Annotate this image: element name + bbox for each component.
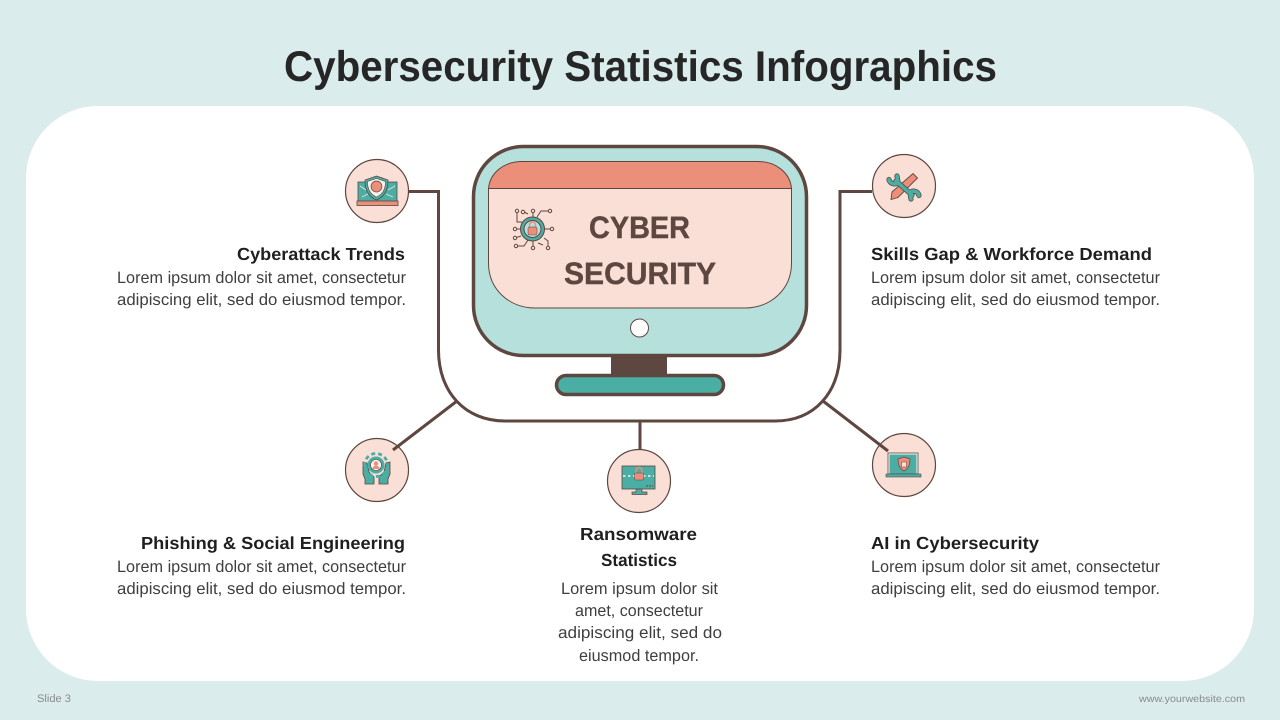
monitor label: CYBER — [589, 210, 690, 245]
item: Phishing — [117, 438, 408, 598]
monitor stand — [611, 355, 667, 377]
body text — [117, 558, 406, 598]
heading: Cyberattack Trends — [237, 244, 405, 264]
monitor label — [564, 210, 716, 291]
item: Ransomware — [558, 450, 722, 665]
body text: adipiscing elit, sed do eiusmod tempor. — [117, 580, 406, 598]
monitor — [474, 146, 806, 394]
slide number: Slide 3 — [37, 693, 71, 705]
heading: Statistics — [601, 550, 677, 570]
monitor screen — [488, 188, 792, 308]
icon: circuit lock — [513, 209, 554, 250]
website: www.yourwebsite.com — [1138, 694, 1245, 705]
body text: adipiscing elit, sed do — [558, 624, 722, 642]
heading: AI in Cybersecurity — [871, 533, 1039, 553]
body text: Lorem ipsum dolor sit amet, consectetur — [871, 269, 1160, 287]
body text: Lorem ipsum dolor sit amet, consectetur — [871, 558, 1160, 576]
item: Cyberattack Trends — [117, 160, 408, 309]
heading — [580, 524, 697, 570]
icon: shield laptop — [346, 160, 408, 222]
body text: Lorem ipsum dolor sit amet, consectetur — [117, 269, 406, 287]
body text — [871, 558, 1160, 598]
title: Cybersecurity Statistics Infographics — [284, 43, 997, 91]
icon: hands and gear — [346, 438, 408, 502]
body text — [117, 269, 406, 309]
body text: adipiscing elit, sed do eiusmod tempor. — [871, 291, 1160, 309]
body text: adipiscing elit, sed do eiusmod tempor. — [117, 291, 406, 309]
panel: white card — [26, 106, 1254, 681]
monitor button — [630, 319, 648, 337]
body text — [558, 580, 722, 665]
body text: Lorem ipsum dolor sit amet, consectetur — [117, 558, 406, 576]
item: AI in Cybersecurity — [871, 434, 1160, 598]
connector lines — [393, 192, 888, 451]
icon: wrench and pencil — [872, 154, 936, 218]
monitor base — [556, 376, 724, 394]
screen header bar — [488, 162, 792, 188]
body text — [871, 269, 1160, 309]
icon: locked monitor — [608, 450, 670, 512]
body text: amet, consectetur — [575, 602, 703, 620]
item: Skills Gap — [871, 154, 1160, 309]
monitor label: SECURITY — [564, 256, 716, 291]
monitor body — [474, 146, 806, 356]
icon: shield laptop — [872, 434, 936, 496]
body text: adipiscing elit, sed do eiusmod tempor. — [871, 580, 1160, 598]
body text: eiusmod tempor. — [579, 647, 699, 665]
heading: Phishing & Social Engineering — [141, 533, 405, 553]
heading: Skills Gap & Workforce Demand — [871, 244, 1152, 264]
body text: Lorem ipsum dolor sit — [561, 580, 718, 598]
heading: Ransomware — [580, 524, 697, 544]
